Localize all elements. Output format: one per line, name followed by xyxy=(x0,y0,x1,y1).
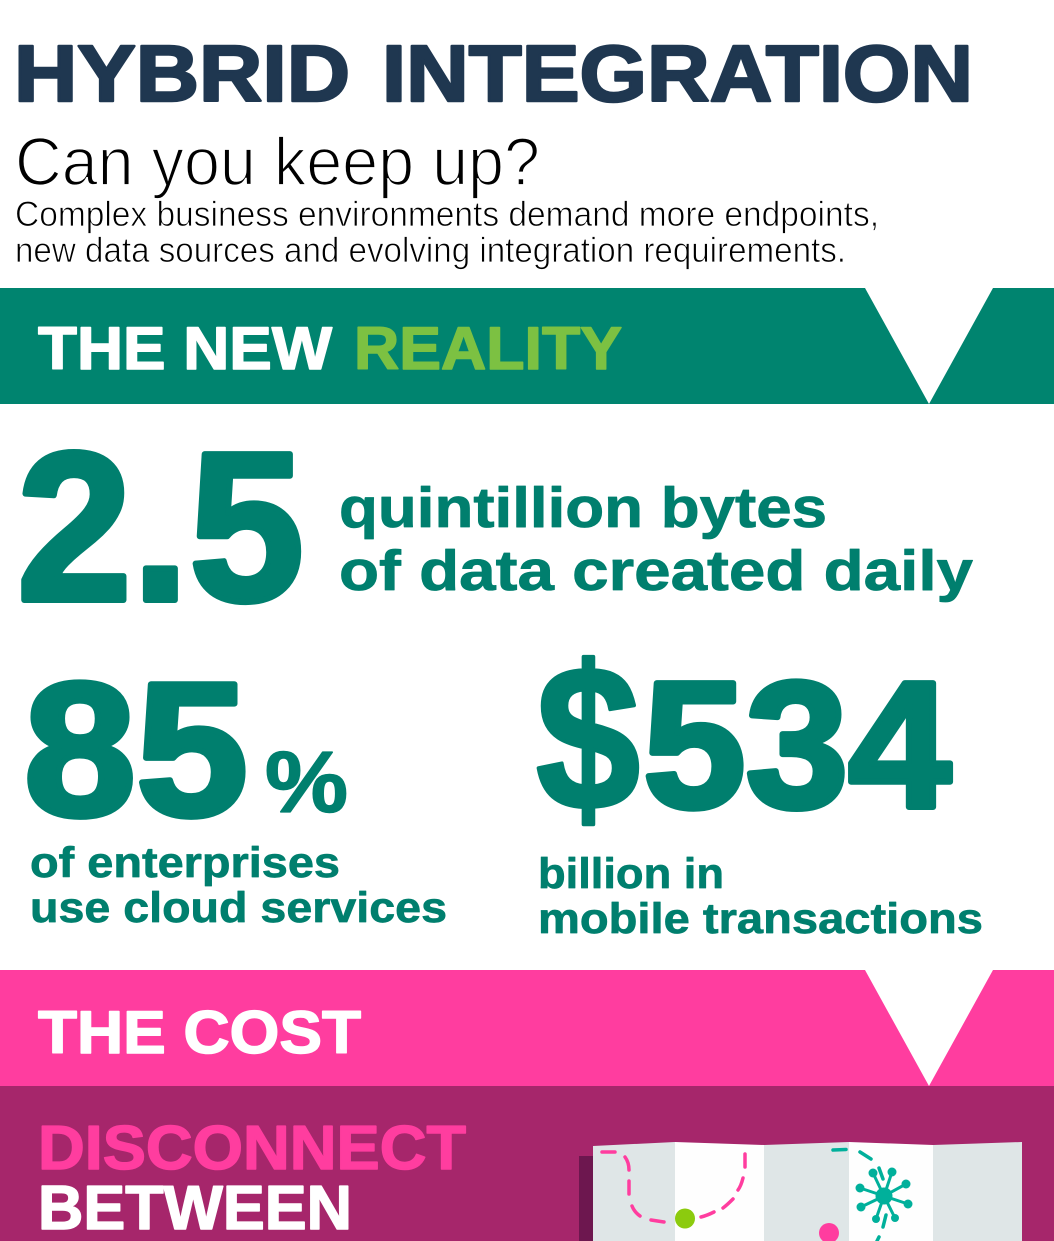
stat: 85 percent: 85 xyxy=(24,644,248,856)
heading: the cost: THE COST xyxy=(38,999,361,1066)
heading: the new reality: REALITY xyxy=(354,315,622,382)
title: INTEGRATION xyxy=(382,29,973,118)
panel: disconnect between xyxy=(0,1086,1054,1241)
stat: 534 billion: $ xyxy=(536,624,640,853)
panel: the cost banner xyxy=(0,970,1054,1086)
subtitle: Can you keep up? xyxy=(15,124,540,200)
stat: 2.5 quintillion bytes: 2.5 xyxy=(17,408,304,645)
stat: 534 billion: mobile transactions xyxy=(538,895,983,943)
title: HYBRID xyxy=(14,29,350,118)
marker: green dot xyxy=(675,1208,695,1228)
title xyxy=(14,29,973,118)
stat: 534 billion: 534 xyxy=(643,645,951,846)
stat: 534 billion xyxy=(536,624,983,943)
intro text: new data sources and evolving integration requirements. xyxy=(15,231,846,270)
stat: 534 billion: billion in xyxy=(538,850,724,898)
heading: the new reality xyxy=(38,315,622,382)
stat: 85 percent: use cloud services xyxy=(30,884,447,932)
panel: the new reality banner xyxy=(0,288,1054,404)
stat: 85 percent: of enterprises xyxy=(30,839,340,887)
stat: 2.5 quintillion bytes: of data created daily xyxy=(339,539,973,603)
stat: 2.5 quintillion bytes xyxy=(17,408,973,645)
heading: disconnect between: BETWEEN xyxy=(38,1174,352,1241)
stat: 2.5 quintillion bytes: quintillion bytes xyxy=(339,476,827,540)
heading: disconnect between xyxy=(38,1114,466,1241)
route: pink dashed xyxy=(602,1152,745,1222)
heading: the new reality: THE NEW xyxy=(38,315,332,382)
marker: pink dot xyxy=(819,1223,839,1241)
intro text xyxy=(15,195,879,270)
intro text: Complex business environments demand more endpoints, xyxy=(15,195,879,234)
route: teal dashed xyxy=(833,1150,886,1241)
stat: 85 percent xyxy=(24,644,447,932)
heading: disconnect between: DISCONNECT xyxy=(38,1114,466,1183)
icon: network hub xyxy=(856,1168,912,1223)
icon: folded map xyxy=(579,1142,1022,1241)
stat: 85 percent: % xyxy=(265,735,348,831)
